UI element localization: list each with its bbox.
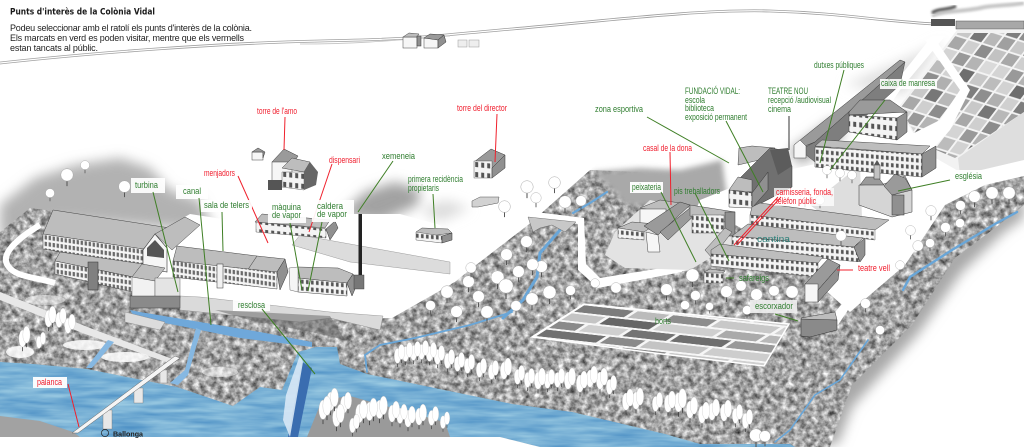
water: island with poplars: [307, 396, 450, 437]
building: caixa de manresa apartments: [849, 100, 907, 140]
label: turbina: turbina: [135, 180, 158, 190]
label: primera residència propietaris: propietaris: [408, 183, 439, 193]
label: escorxador: escorxador: [755, 301, 793, 311]
water: grey shore at left bank: [0, 416, 80, 437]
label: caixa de manresa: [830, 78, 937, 170]
label: carnisseria, fonda, telèfon públic: telèfon públic: [776, 196, 816, 206]
building: peixateria and workers' housing: [618, 200, 735, 258]
label: safareigs: [726, 273, 769, 283]
label: dispensari: [309, 155, 360, 232]
building: teatre vell: [805, 259, 840, 302]
label: pis treballadors: [674, 186, 729, 261]
label: màquina de vapor: de vapor: [272, 210, 301, 220]
building: torre de l'amo: [252, 148, 318, 190]
building: teatre nou long barracks: [794, 60, 905, 162]
label: carnisseria, fonda, telèfon públic: carnisseria, fonda,: [776, 187, 833, 197]
building: Fundació Vidal: [729, 146, 792, 208]
label: Fundació Vidal: biblioteca: [685, 103, 714, 113]
building: long terraces: [711, 203, 889, 277]
label: turbina: [131, 178, 178, 292]
label: carnisseria, fonda, telèfon públic: [734, 187, 834, 245]
label: horts: horts: [655, 316, 671, 326]
water: main river: [0, 347, 795, 447]
label: zona esportiva: [595, 104, 729, 163]
credit: Ballonga: Ballonga: [113, 430, 144, 438]
intro text: [10, 23, 252, 53]
label: caixa de manresa: caixa de manresa: [881, 78, 935, 88]
label: Teatre Nou: TEATRE NOU: [768, 86, 808, 96]
label: torre de l'amo: torre de l'amo: [257, 106, 297, 116]
label: cantina: cantina: [757, 234, 790, 244]
building: school block: [815, 140, 936, 177]
label: caldera de vapor: [308, 200, 354, 291]
label: Fundació Vidal: escola: [685, 95, 705, 105]
label: xemeneia: [358, 151, 415, 212]
intro text: estan tancats al públic.: [10, 43, 98, 53]
label: canal: canal: [183, 186, 201, 196]
label: torre de l'amo: [257, 106, 297, 150]
label: casal de la dona: casal de la dona: [643, 143, 692, 153]
label: sala de telers: sala de telers: [204, 200, 250, 210]
label: menjadors: menjadors: [204, 168, 235, 178]
label: caldera de vapor: de vapor: [317, 209, 347, 219]
label: dutxes públiques: dutxes públiques: [814, 60, 864, 70]
label: Teatre Nou: cinema: [768, 104, 791, 114]
water: canal: [130, 310, 312, 347]
trees: round orchard trees: [46, 161, 1015, 338]
label: Teatre Nou: recepció /audiovisual: [768, 95, 831, 105]
rock terraces under the factory wall: [215, 310, 345, 340]
label: Fundació Vidal: [685, 86, 763, 192]
label: torre del director: [457, 103, 507, 162]
building: bridge arch in the gorge: [528, 217, 576, 232]
terrain: textured rocky ground: [0, 170, 1024, 447]
label: peixateria: peixateria: [632, 182, 661, 192]
label: menjadors: [204, 168, 268, 243]
label: església: [898, 170, 988, 191]
label: Teatre Nou: [768, 86, 831, 150]
title: Punts d'interès de la Colònia Vidal: [10, 6, 155, 18]
label: caldera de vapor: caldera: [317, 201, 343, 211]
label: zona esportiva: zona esportiva: [595, 104, 643, 114]
field area: upper right allotments: [898, 30, 1024, 175]
label: palanca: [33, 377, 79, 427]
water: waterfall at the dam: [288, 362, 312, 437]
label: església: església: [955, 171, 982, 181]
label: primera residència propietaris: [408, 174, 463, 228]
label: resclosa: [233, 300, 315, 374]
railway line across the horizon: [0, 10, 934, 64]
terrain: smooth grey slope behind central complex: [592, 160, 728, 212]
label: dutxes públiques: [814, 60, 864, 163]
label: màquina de vapor: màquina: [272, 202, 301, 212]
terrain: shadow band along lower right edge: [800, 195, 1024, 447]
building: menjadors and dispensari row: [255, 214, 338, 240]
white road and factory plateau: [0, 36, 970, 364]
train with steam on horizon: [931, 3, 1024, 29]
label: torre del director: torre del director: [457, 103, 507, 113]
intro text: Els marcats en verd es poden visitar, mentre que els vermells: [10, 33, 244, 43]
intro text: Podeu seleccionar amb el ratolí els punts d'interès de la colònia.: [10, 23, 252, 33]
label: peixateria: [630, 182, 696, 262]
light boulders on left bank: [6, 295, 238, 377]
building: torre del director: [472, 149, 505, 207]
label: teatre vell: [837, 262, 893, 274]
label: casal de la dona: [643, 143, 692, 205]
label: canal: [176, 185, 211, 325]
label: dispensari: dispensari: [329, 155, 360, 165]
trees: poplar rows: [19, 306, 771, 447]
bottom white edge: [0, 437, 540, 447]
vegetable plots: horts: [532, 304, 789, 366]
building: safareigs: [704, 269, 725, 283]
bridge: palanca footbridge: [72, 356, 180, 433]
label: Fundació Vidal: FUNDACIÓ VIDAL:: [685, 86, 740, 96]
label: màquina de vapor: [268, 202, 306, 290]
label: safareigs: safareigs: [739, 273, 769, 283]
water: tributary streams: [365, 192, 1017, 442]
label: sala de telers: [201, 200, 252, 251]
building: escorxador: [801, 312, 837, 337]
label: pis treballadors: pis treballadors: [674, 186, 720, 196]
wall below factory: [180, 296, 383, 330]
houses on the horizon: [403, 33, 479, 48]
terrain: soft hills behind the factory: [0, 40, 945, 240]
label: teatre vell: teatre vell: [858, 263, 890, 273]
label: xemeneia: xemeneia: [382, 151, 415, 161]
label: Fundació Vidal: exposició permanent: [685, 112, 747, 122]
label: escorxador: [750, 300, 798, 321]
label: primera residència propietaris: primera recidència: [408, 174, 463, 184]
label: resclosa: resclosa: [238, 300, 265, 310]
building: primera residència: [416, 228, 452, 243]
label: palanca: palanca: [37, 377, 62, 387]
building: main textile factory: [43, 210, 288, 308]
building: church: [859, 160, 912, 217]
light courtyards in the colony: [292, 165, 862, 312]
building: boiler house and chimney: [289, 214, 364, 296]
